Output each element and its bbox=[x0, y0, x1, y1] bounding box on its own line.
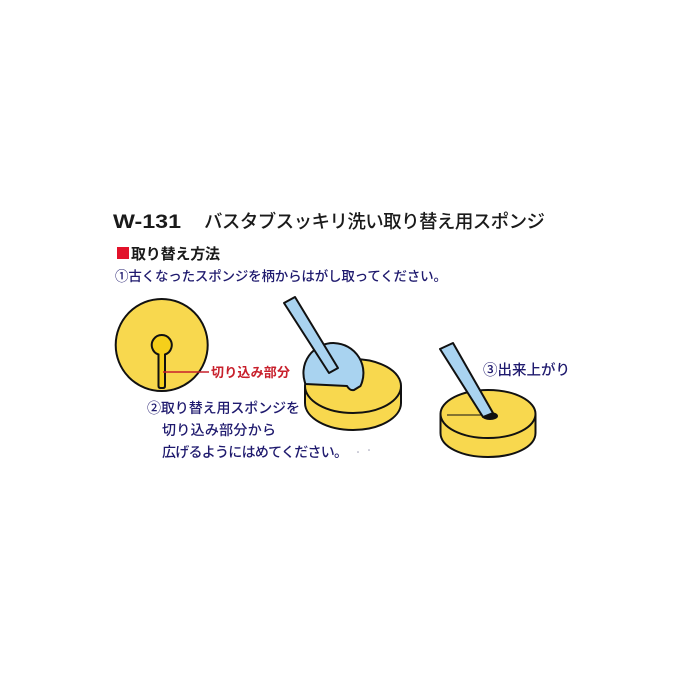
step 2 text bbox=[147, 400, 348, 460]
step 2 text: ②取り替え用スポンジを bbox=[147, 400, 300, 416]
step 1 text: ①古くなったスポンジを柄からはがし取ってください。 bbox=[115, 268, 447, 284]
sponge body bbox=[305, 387, 401, 430]
red leader line bbox=[163, 371, 209, 373]
diagram: fitting sponge over the handle bbox=[284, 297, 401, 430]
hole bbox=[483, 413, 497, 419]
slit part label: 切り込み部分 bbox=[211, 365, 290, 380]
specks bbox=[357, 449, 370, 453]
title: W-131 bbox=[113, 211, 181, 233]
diagram: sponge top view with slit bbox=[116, 299, 209, 391]
diagram: finished sponge bbox=[440, 343, 536, 457]
blue sponge flap bbox=[303, 343, 363, 390]
slit line bbox=[447, 414, 482, 416]
handle bbox=[284, 297, 338, 373]
keyhole slit bbox=[152, 335, 172, 388]
step 2 text: 広げるようにはめてください。 bbox=[162, 444, 348, 460]
sponge body bbox=[440, 415, 536, 457]
handle bbox=[440, 343, 493, 417]
heading: replacement method: 取り替え方法 bbox=[131, 245, 220, 263]
step 3 text: ③出来上がり bbox=[483, 361, 570, 379]
step 2 text: 切り込み部分から bbox=[162, 422, 276, 438]
title: バスタブスッキリ洗い取り替え用スポンジ bbox=[204, 211, 545, 232]
